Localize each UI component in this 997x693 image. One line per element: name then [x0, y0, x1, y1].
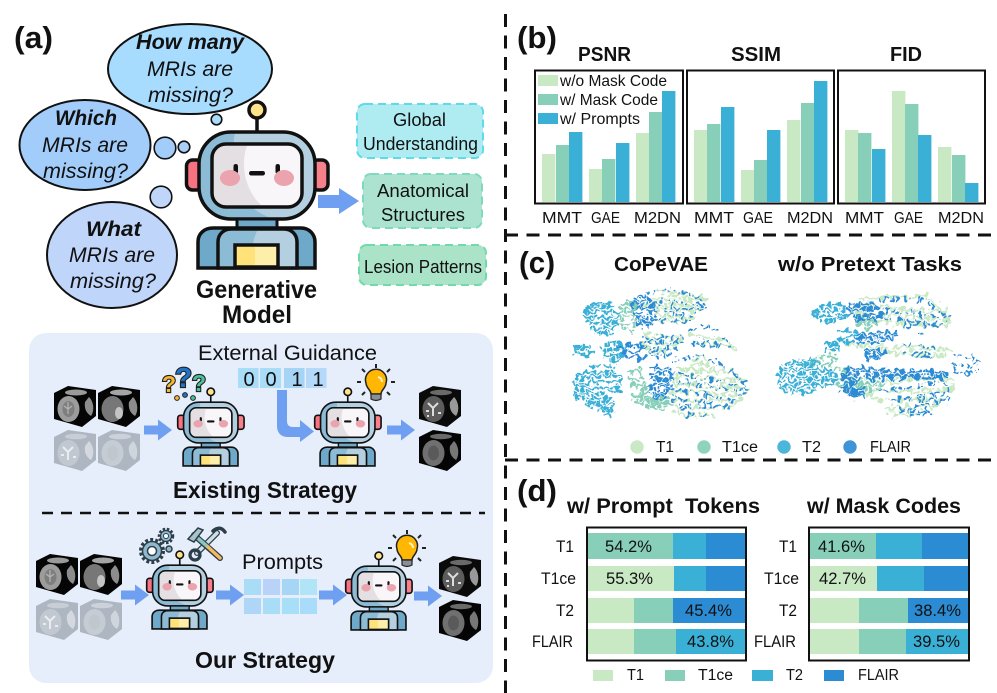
icon: robot with prompts: [346, 552, 412, 630]
arrow: model to outputs: [318, 188, 359, 214]
arrow: input to robot: [144, 420, 172, 440]
stacked bars legend: T1: [627, 667, 644, 684]
stacked bars legend: T2: [786, 667, 803, 684]
existing strategy output MRI cubes: [419, 386, 461, 471]
stacked bars: prompt tokens: 43.8%: [687, 633, 734, 651]
title: CoPeVAE: CoPeVAE: [614, 254, 708, 276]
panel label (d): (d): [517, 473, 557, 508]
bubble: how many: [108, 24, 272, 114]
stacked bars: prompt tokens: T2: [556, 602, 574, 620]
stacked bars: prompt tokens: 55.3%: [606, 570, 653, 588]
stacked bars: prompt tokens: 45.4%: [685, 602, 732, 620]
arrow: robot to output: [414, 586, 442, 606]
scatter legend: T1: [656, 439, 674, 456]
chart: PSNR: MMT: [542, 210, 582, 227]
bubble: what: MRIs are: [69, 244, 155, 267]
chart: PSNR: M2DN: [634, 210, 681, 227]
icon: robot self-guided: [147, 551, 213, 629]
scatter legend: T1ce: [722, 439, 758, 456]
title: with prompt tokens: w/ Prompt Tokens: [566, 495, 760, 518]
chart: SSIM: GAE: [743, 210, 773, 227]
scatter plot: without pretext tasks: [778, 296, 978, 416]
heading: existing strategy: Existing Strategy: [173, 477, 357, 503]
box: global understanding: Global: [393, 110, 446, 130]
chart: SSIM: [687, 44, 834, 227]
bubble: what: What: [86, 218, 142, 241]
icon: light bulb: [357, 364, 395, 400]
scatter legend: [630, 439, 911, 456]
bubble: how many: How many: [136, 31, 245, 54]
chart: SSIM: SSIM: [731, 44, 781, 66]
icon: hammer and wrench: [188, 528, 225, 560]
box: anatomical structures: Structures: [381, 205, 465, 225]
icon: question marks: [162, 362, 206, 400]
box: global understanding: Understanding: [363, 134, 478, 154]
chart: FID: MMT: [845, 210, 884, 227]
bubble: which: MRIs are: [42, 134, 128, 157]
stacked bars: prompt tokens: T1ce: [541, 570, 576, 588]
chart legend: w/ Mask Code: [559, 92, 658, 109]
label: generative model: Generative: [196, 276, 317, 304]
scatter legend: FLAIR: [870, 439, 911, 456]
panel label (b): (b): [517, 20, 557, 55]
icon: robot with guidance: [315, 388, 381, 466]
icon: question marks: ?: [192, 370, 206, 396]
stacked bars: mask codes: T1ce: [764, 570, 799, 588]
external guidance code cells: 1: [291, 369, 303, 391]
stacked bars: prompt tokens: [532, 528, 746, 660]
box: anatomical structures: [363, 174, 482, 228]
chart legend: w/o Mask Code: [559, 73, 667, 90]
arrow: prompts to robot: [319, 584, 347, 606]
scatter plot: CoPeVAE: [574, 290, 750, 417]
stacked bars: mask codes: T2: [779, 602, 797, 620]
label: generative model: Model: [222, 301, 292, 329]
our strategy input MRI cubes: [36, 554, 122, 640]
icon: robot without guidance: [178, 388, 244, 466]
panel label (c): (c): [519, 245, 555, 280]
chart legend: [538, 73, 667, 128]
arrow: guidance into robot: [277, 390, 314, 442]
icon: gears: [140, 529, 173, 562]
chart: FID: M2DN: [938, 210, 984, 227]
external guidance code cells: [238, 368, 326, 391]
icon: question marks: ?: [175, 362, 192, 393]
box: anatomical structures: Anatomical: [377, 181, 469, 201]
chart: PSNR: PSNR: [578, 44, 632, 66]
bubble: which: missing?: [43, 160, 128, 183]
scatter legend: T2: [802, 439, 821, 456]
title: with mask codes: w/ Mask Codes: [806, 495, 961, 518]
stacked bars legend: [593, 667, 899, 684]
chart: FID: GAE: [894, 210, 923, 227]
label: generative model: [196, 276, 317, 329]
icon: generative model robot: [186, 102, 328, 268]
external guidance code cells: 1: [312, 369, 324, 391]
box: lesion patterns: Lesion Patterns: [364, 257, 482, 277]
icon: question marks: ?: [162, 371, 176, 397]
existing strategy input MRI cubes: [54, 386, 140, 471]
prompt token grid: [244, 579, 317, 614]
bubble: which: Which: [55, 107, 117, 130]
our strategy output MRI cubes: [439, 556, 481, 641]
panel: strategies: [29, 333, 493, 683]
title: w/o pretext tasks: w/o Pretext Tasks: [777, 254, 962, 276]
icon: light bulb: [388, 530, 426, 566]
thought dots: [150, 114, 222, 208]
thought bubbles: [20, 24, 272, 308]
stacked bars: prompt tokens: 54.2%: [605, 538, 652, 556]
chart legend: w/ Prompts: [559, 111, 640, 128]
chart: FID: [838, 44, 985, 227]
bubble: how many: MRIs are: [147, 58, 233, 81]
bubble: what: missing?: [70, 270, 156, 293]
heading: prompts: Prompts: [242, 551, 323, 574]
stacked bars: mask codes: 38.4%: [914, 602, 961, 620]
arrow: robot to output: [387, 420, 415, 440]
stacked bars legend: T1ce: [698, 667, 733, 684]
chart: FID: FID: [890, 44, 922, 66]
chart: PSNR: GAE: [591, 210, 620, 227]
chart: SSIM: M2DN: [787, 210, 833, 227]
bubble: which: [20, 100, 150, 190]
bubble: how many: missing?: [148, 84, 233, 107]
stacked bars: mask codes: 42.7%: [819, 570, 866, 588]
external guidance code cells: 0: [243, 369, 255, 391]
arrow: input to robot: [121, 584, 149, 606]
external guidance code cells: 0: [265, 369, 277, 391]
stacked bars: prompt tokens: FLAIR: [532, 633, 573, 651]
arrow: robot to prompts: [216, 584, 244, 606]
bubble: what: [47, 202, 177, 308]
stacked bars: mask codes: FLAIR: [754, 633, 796, 651]
chart: PSNR: [535, 44, 683, 227]
heading: external guidance: External Guidance: [198, 342, 377, 365]
stacked bars: mask codes: 39.5%: [913, 633, 960, 651]
box: global understanding: [357, 104, 483, 158]
panel label (a): (a): [14, 20, 53, 55]
heading: our strategy: Our Strategy: [195, 647, 335, 673]
box: lesion patterns: [359, 245, 486, 285]
stacked bars: prompt tokens: T1: [556, 538, 574, 556]
stacked bars: mask codes: [754, 528, 969, 660]
stacked bars: mask codes: T1: [779, 538, 797, 556]
stacked bars: mask codes: 41.6%: [818, 538, 865, 556]
stacked bars legend: FLAIR: [858, 667, 899, 684]
chart: SSIM: MMT: [694, 210, 734, 227]
